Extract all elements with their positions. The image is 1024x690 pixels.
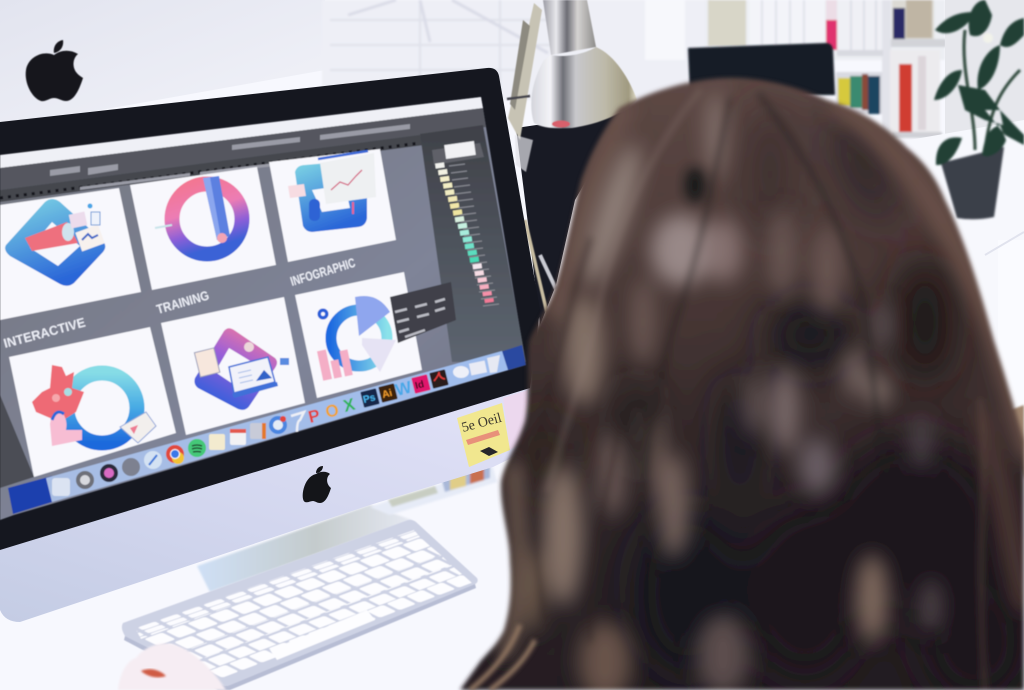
ring with map xyxy=(32,365,156,446)
lamp shade xyxy=(531,0,637,128)
desk tray under chin xyxy=(370,462,497,515)
donut chart with pencil xyxy=(155,176,242,254)
black chair xyxy=(688,43,835,95)
wall behind plant xyxy=(945,0,1024,150)
dock icons: W xyxy=(393,377,414,400)
align panel xyxy=(390,282,456,343)
dock icons: P xyxy=(306,406,322,427)
dock icons: Ai xyxy=(381,388,394,401)
blurred white shelves behind xyxy=(322,0,712,100)
shadow masses xyxy=(529,97,1024,690)
artboard 3 xyxy=(269,149,396,262)
donut, pie and bars xyxy=(317,296,396,381)
dark area behind lamp xyxy=(516,112,625,325)
icon: apple logo on back iMac xyxy=(26,40,83,101)
keyboard xyxy=(122,520,478,690)
screen xyxy=(0,97,526,520)
screen background xyxy=(0,97,526,520)
swatches xyxy=(435,158,494,307)
artboard: interactive xyxy=(9,327,176,477)
hand xyxy=(118,643,226,690)
right side table xyxy=(909,120,1024,440)
dock xyxy=(46,351,508,502)
bookshelf xyxy=(705,0,946,138)
artboard: infographic xyxy=(295,272,422,398)
potted plant xyxy=(934,0,1024,219)
fingernail xyxy=(141,669,166,677)
dock wallpaper corners xyxy=(8,476,52,514)
lamp arm and joints xyxy=(507,3,556,317)
artboard 1 xyxy=(0,188,141,320)
hair xyxy=(450,60,1024,690)
monitor chin xyxy=(0,385,530,622)
highlights xyxy=(522,91,942,690)
monitor black bezel xyxy=(0,68,540,550)
illustration: chart with microphone xyxy=(288,151,376,232)
fine strands xyxy=(535,90,985,690)
warm edge tone xyxy=(505,105,1024,650)
swatch panel xyxy=(420,125,526,362)
menu bar xyxy=(0,97,483,168)
dock icons: O xyxy=(323,400,341,422)
icon: blue diamond with megaphone xyxy=(5,199,105,286)
artboard 2 xyxy=(130,167,276,290)
dock icons: X xyxy=(341,395,358,416)
back of second iMac xyxy=(0,0,325,128)
dark crown spot xyxy=(684,167,706,203)
monitor stand xyxy=(197,505,412,592)
diamond with laptop xyxy=(194,328,289,410)
dock icons xyxy=(52,355,500,496)
left toolbar xyxy=(0,395,34,488)
heading: INFOGRAPHIC: INFOGRAPHIC xyxy=(288,255,357,289)
artboard: training xyxy=(161,297,305,435)
heading: TRAINING: TRAINING xyxy=(155,288,211,317)
dock icons: Ps xyxy=(362,392,377,406)
stray curls at lower left xyxy=(470,625,535,690)
sticky note: 5e Oeil xyxy=(460,411,504,436)
icon: apple logo on iMac chin xyxy=(303,466,331,503)
dock icons: Id xyxy=(414,379,425,392)
toolbar xyxy=(0,108,486,190)
heading: INTERACTIVE: INTERACTIVE xyxy=(2,315,87,351)
sticky note xyxy=(457,403,510,467)
